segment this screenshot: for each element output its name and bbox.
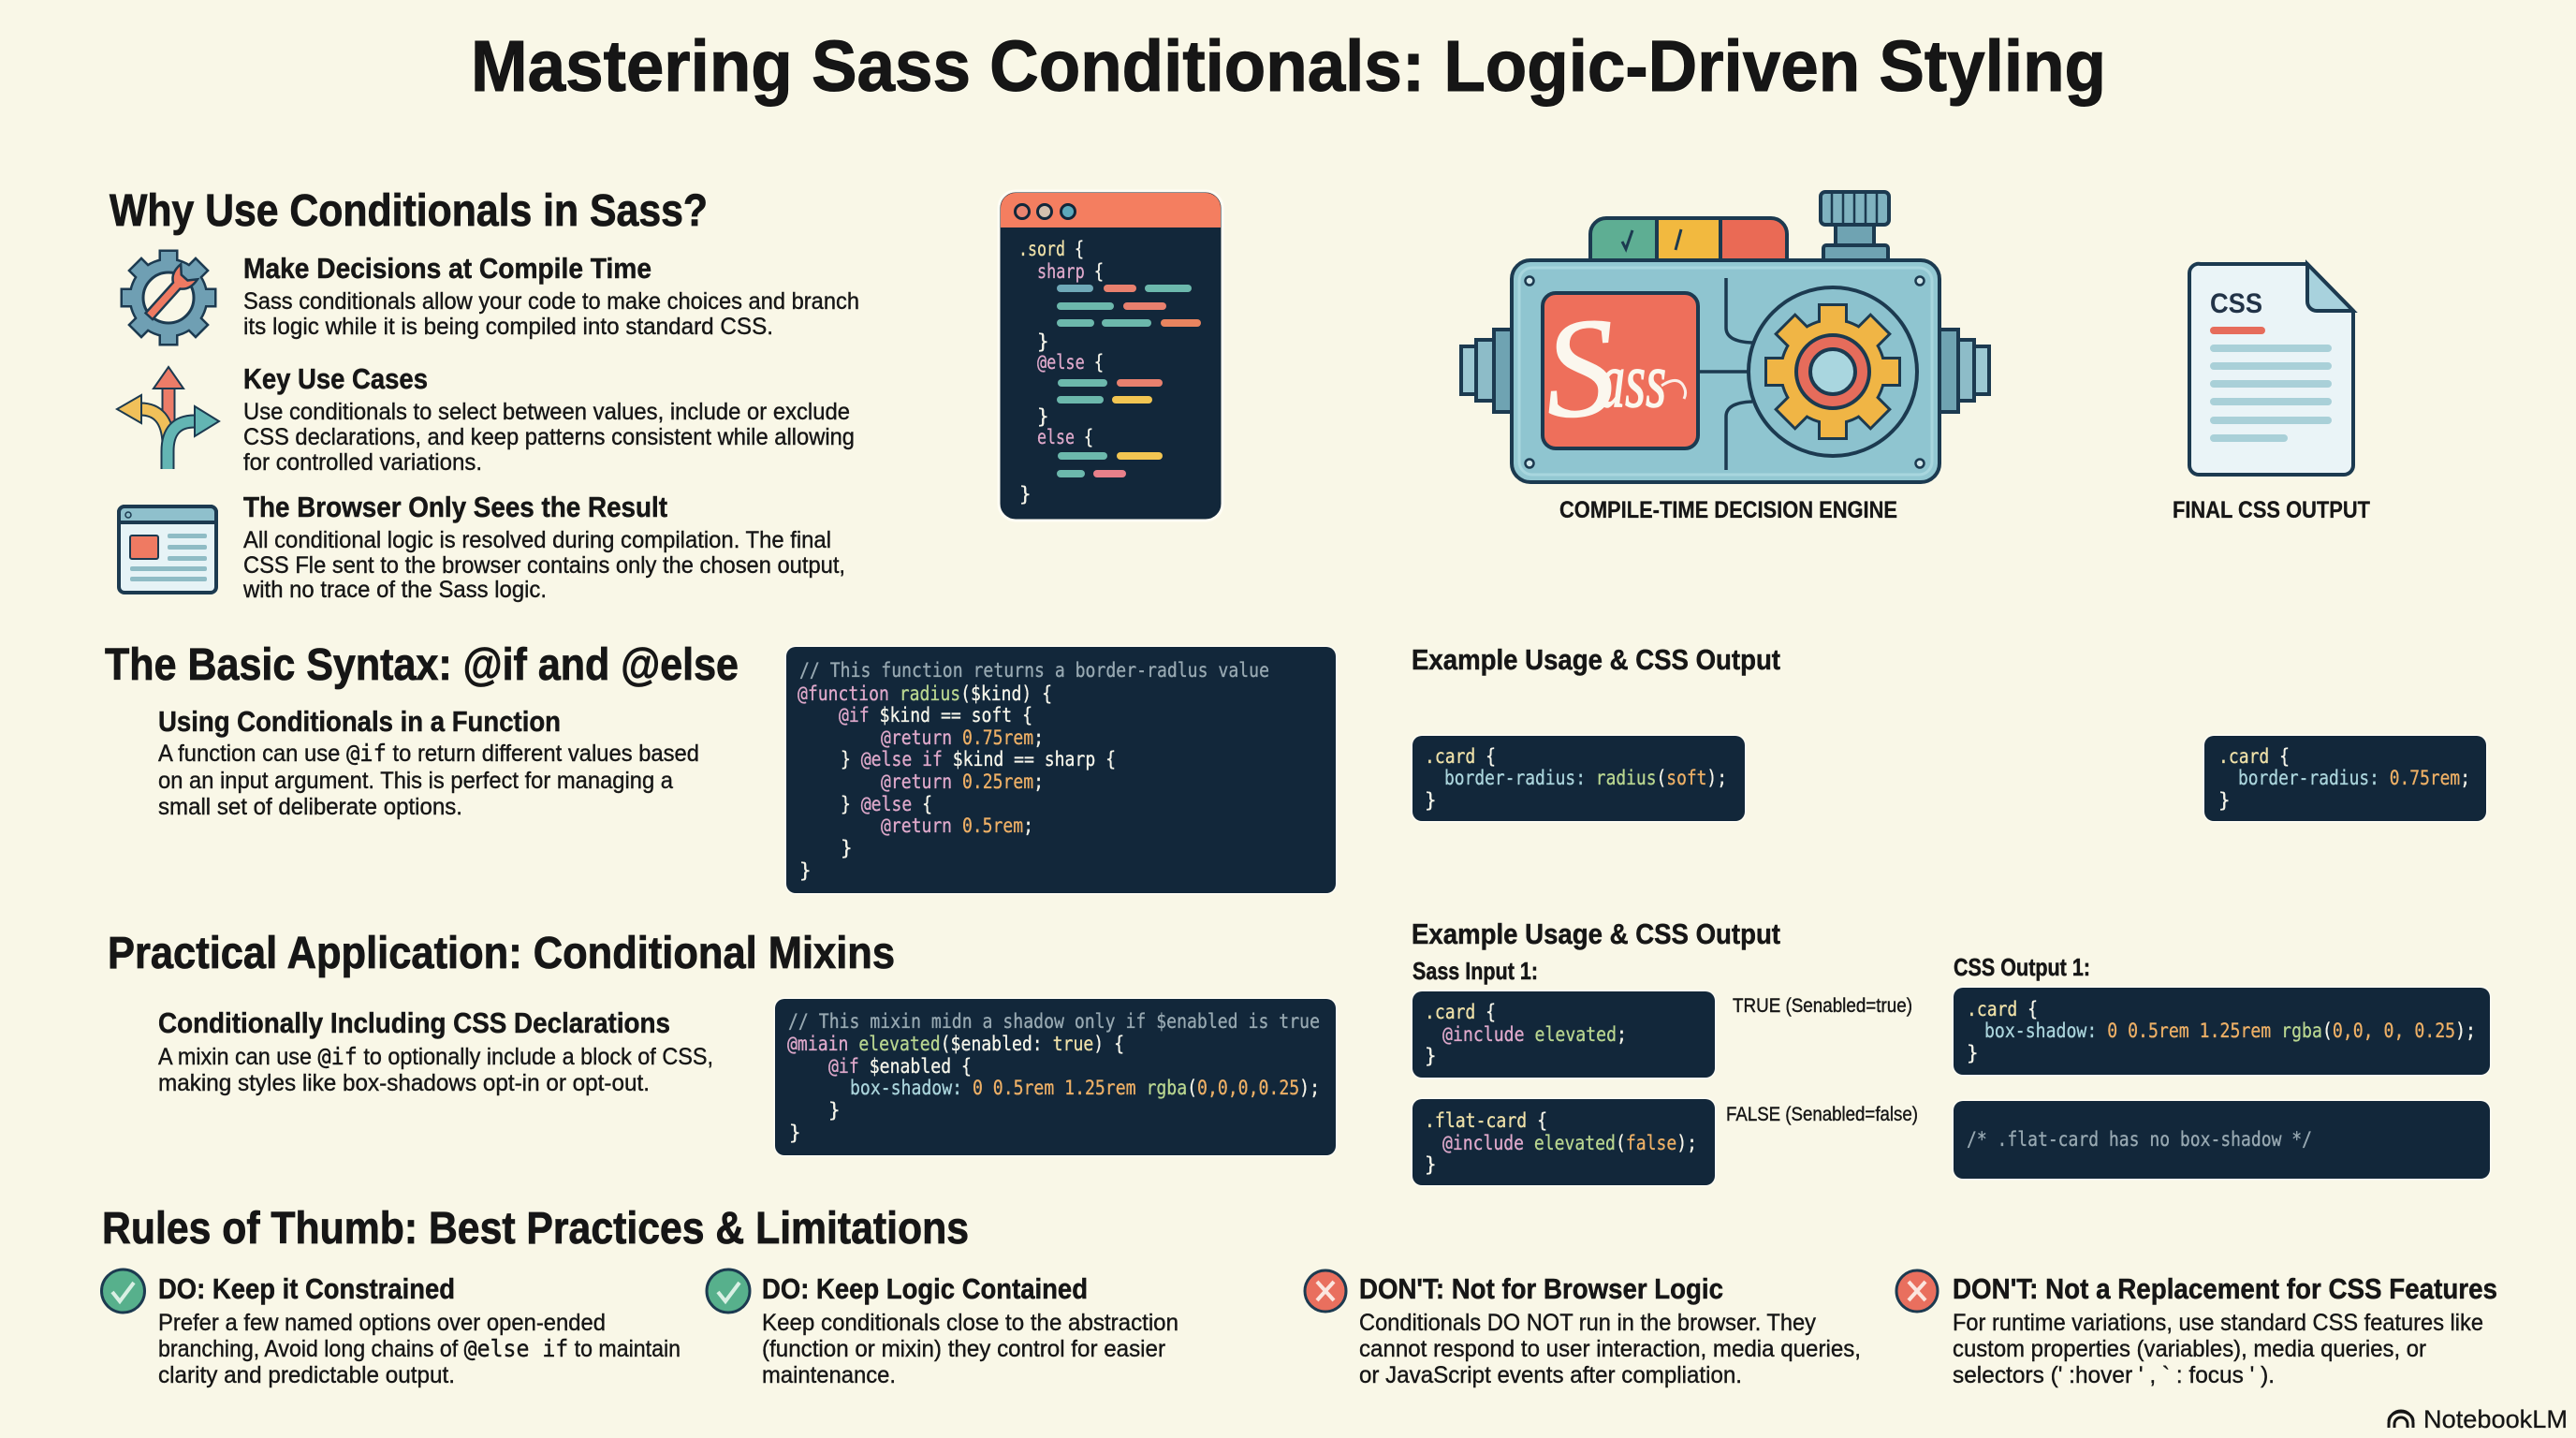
rule: keep it constrained: branching, Avoid long chains of @else if to maintain [158, 1335, 681, 1362]
rule: not for browser logic: cannot respond to user interaction, media queries, [1359, 1336, 1861, 1362]
text: browser only sees the result: All conditional logic is resolved during compilation. The final [243, 527, 831, 553]
rule: not a replacement: DON'T: Not a Replacement for CSS Features [1953, 1272, 2497, 1305]
text: make decisions: Sass conditionals allow your code to make choices and branch [243, 288, 859, 315]
rule: not a replacement: custom properties (variables), media queries, or [1953, 1336, 2426, 1362]
icon: compile-time decision engine [1461, 192, 1989, 482]
code block: card include [1412, 991, 1715, 1078]
sass logo panel: ass [1599, 337, 1666, 424]
panel: practical application [108, 929, 1336, 1155]
rule: keep logic contained: DO: Keep Logic Contained [762, 1272, 1088, 1305]
text: using conditionals in a function: Using Conditionals in a Function [158, 705, 561, 738]
code block: flat-card include: @include elevated(false); [1442, 1132, 1697, 1154]
panel: rules of thumb [101, 1204, 2497, 1388]
heading: basic syntax: The Basic Syntax: @if and @else [105, 640, 739, 690]
code block: elevated mixin: // This mixin midn a shadow only if $enabled is true [788, 1010, 1320, 1033]
sass logo panel: S [1540, 288, 1620, 448]
code window illustration: sharp { [1037, 260, 1104, 283]
code block: radius function: } [841, 837, 853, 859]
text: using conditionals in a function: small set of deliberate options. [158, 794, 462, 820]
code block: radius function: } @else if $kind == sharp { [841, 748, 1116, 770]
code block: card include: } [1425, 1045, 1437, 1067]
code window illustration: else { [1037, 426, 1093, 448]
code block: radius function: @function radius($kind) { [798, 682, 1052, 705]
top dial [1821, 192, 1889, 261]
code block: card input: } [1425, 789, 1437, 812]
rule: keep it constrained [158, 1272, 681, 1388]
code block: elevated mixin: @if $enabled { [828, 1055, 972, 1078]
code block: radius function: } [799, 859, 812, 882]
code block: card output: .card { [2218, 745, 2290, 768]
panel: example usage mixin [1412, 917, 2490, 1185]
engine body [1512, 260, 1939, 482]
icon: css document [2189, 264, 2353, 475]
label: engine: COMPILE-TIME DECISION ENGINE [1559, 497, 1897, 523]
text: browser only sees the result: The Browser Only Sees the Result [243, 491, 667, 523]
text: key use cases: Use conditionals to select between values, include or exclude [243, 399, 850, 425]
code block: elevated mixin: box-shadow: 0 0.5rem 1.25rem rgba(0,0,0,0.25); [850, 1077, 1320, 1099]
code block: radius function: @return 0.5rem; [881, 814, 1033, 837]
icon: branching arrows [117, 367, 219, 469]
title: Mastering Sass Conditionals: Logic-Driven Styling [471, 26, 2106, 107]
heading: example usage: Example Usage & CSS Output [1412, 643, 1780, 676]
code block: elevated mixin: } [828, 1099, 841, 1122]
text: make decisions: its logic while it is being compiled into standard CSS. [243, 314, 773, 340]
code block: css output with shadow [1954, 988, 2490, 1075]
icon: cross [1896, 1270, 1938, 1312]
rule: not for browser logic: or JavaScript events after compliation. [1359, 1362, 1742, 1388]
rule: keep logic contained [762, 1272, 1178, 1388]
code window illustration: } [1037, 405, 1049, 428]
code window illustration: } [1037, 330, 1049, 353]
toggle tabs [1590, 218, 1787, 260]
text: using conditionals in a function: on an input argument. This is perfect for managing a [158, 768, 673, 794]
code block: flat-card include: .flat-card { [1425, 1109, 1547, 1132]
text: browser only sees the result: CSS Fle sent to the browser contains only the chosen output, [243, 552, 845, 579]
text: key use cases [243, 362, 855, 476]
icon: check [101, 1269, 144, 1313]
text: conditionally including css: Conditionally Including CSS Declarations [158, 1006, 670, 1039]
rule: not for browser logic [1359, 1272, 1861, 1388]
icon: check [707, 1269, 750, 1313]
rule: not for browser logic: Conditionals DO NOT run in the browser. They [1359, 1310, 1816, 1336]
code block: card include: @include elevated; [1442, 1023, 1627, 1046]
rule: not a replacement [1953, 1272, 2497, 1388]
text: make decisions: Make Decisions at Compile Time [243, 252, 651, 285]
code block: card output [2204, 736, 2486, 821]
code block: elevated mixin: @miain elevated($enabled: true) { [787, 1033, 1124, 1055]
code block: radius function: // This function returns a border-radlus value [799, 659, 1269, 682]
label: css output: CSS Output 1: [1954, 953, 2090, 981]
notebooklm logo: NotebookLM [2423, 1405, 2568, 1433]
panel: basic syntax [105, 640, 1336, 893]
icon: gear with wrench [123, 252, 214, 344]
text: browser only sees the result: with no trace of the Sass logic. [242, 577, 547, 603]
rule: keep logic contained: (function or mixin) they control for easier [762, 1336, 1165, 1362]
code block: css output with shadow: box-shadow: 0 0.5rem 1.25rem rgba(0,0, 0, 0.25); [1984, 1020, 2476, 1042]
heading: rules of thumb: Rules of Thumb: Best Practices & Limitations [102, 1204, 969, 1254]
code block: css output with shadow: .card { [1967, 998, 2038, 1020]
text: key use cases: CSS declarations, and keep patterns consistent while allowing [243, 424, 855, 450]
code block: flat-card include [1412, 1099, 1715, 1185]
heading: example usage: Example Usage & CSS Output [1412, 917, 1780, 950]
rule: not for browser logic: DON'T: Not for Browser Logic [1359, 1272, 1723, 1305]
label: true: TRUE (Senabled=true) [1733, 995, 1912, 1017]
code block: css output no shadow: /* .flat-card has no box-shadow */ [1967, 1128, 2312, 1151]
code block: radius function: @if $kind == soft { [839, 704, 1032, 726]
code block: card input [1412, 736, 1745, 821]
code block: card include: .card { [1425, 1001, 1496, 1023]
text: browser only sees the result [242, 491, 845, 603]
rule: not a replacement: selectors (' :hover ' , ` : focus ' ). [1953, 1362, 2275, 1388]
text: make decisions [243, 252, 859, 340]
code block: elevated mixin [775, 999, 1336, 1155]
label: css output: FINAL CSS OUTPUT [2173, 497, 2370, 523]
code block: radius function: @return 0.25rem; [881, 770, 1044, 793]
text: using conditionals in a function [158, 705, 699, 820]
code block: card output: border-radius: 0.75rem; [2238, 767, 2470, 789]
code window illustration [999, 191, 1222, 521]
text: using conditionals in a function: A function can use @if to return different values based [158, 740, 699, 767]
rule: not a replacement: For runtime variations, use standard CSS features like [1953, 1310, 2483, 1336]
panel: example usage function [1412, 643, 2486, 821]
rule: keep it constrained: DO: Keep it Constrained [158, 1272, 455, 1305]
text: conditionally including css: making styles like box-shadows opt-in or opt-out. [158, 1070, 650, 1096]
code block: css output with shadow: } [1967, 1042, 1979, 1064]
rule: keep it constrained: clarity and predictable output. [158, 1362, 455, 1388]
panel: why use conditionals [110, 186, 859, 603]
text: key use cases: Key Use Cases [243, 362, 428, 395]
sass logo panel [1540, 288, 1698, 448]
rule: keep logic contained: Keep conditionals close to the abstraction [762, 1310, 1178, 1336]
icon: cross [1305, 1270, 1346, 1312]
label: sass input: Sass Input 1: [1412, 957, 1538, 985]
code window illustration: .sord { [1018, 238, 1084, 260]
icon: css document: CSS [2210, 288, 2262, 319]
label: false: FALSE (Senabled=false) [1726, 1104, 1918, 1125]
rule: keep logic contained: maintenance. [762, 1362, 896, 1388]
code block: elevated mixin: } [789, 1122, 801, 1144]
heading: why use conditionals: Why Use Conditionals in Sass? [110, 186, 708, 236]
rule: keep it constrained: Prefer a few named options over open-ended [158, 1310, 606, 1336]
code window illustration: } [1019, 483, 1032, 506]
text: conditionally including css [158, 1006, 713, 1096]
code block: card input: border-radius: radius(soft); [1444, 767, 1727, 789]
side knobs [1461, 330, 1989, 412]
code block: flat-card include: } [1425, 1153, 1437, 1176]
code block: radius function [786, 647, 1336, 893]
code block: css output no shadow [1954, 1101, 2490, 1179]
code window illustration: @else { [1037, 351, 1104, 374]
code block: radius function: } @else { [841, 793, 932, 815]
heading: practical application: Practical Application: Conditional Mixins [108, 929, 895, 978]
text: key use cases: for controlled variations. [243, 449, 482, 476]
text: conditionally including css: A mixin can use @if to optionally include a block of CSS, [158, 1043, 713, 1070]
gear [1749, 287, 1917, 456]
code block: card input: .card { [1425, 745, 1496, 768]
icon: browser window [119, 506, 216, 593]
code block: card output: } [2218, 789, 2231, 812]
code block: radius function: @return 0.75rem; [881, 726, 1044, 749]
